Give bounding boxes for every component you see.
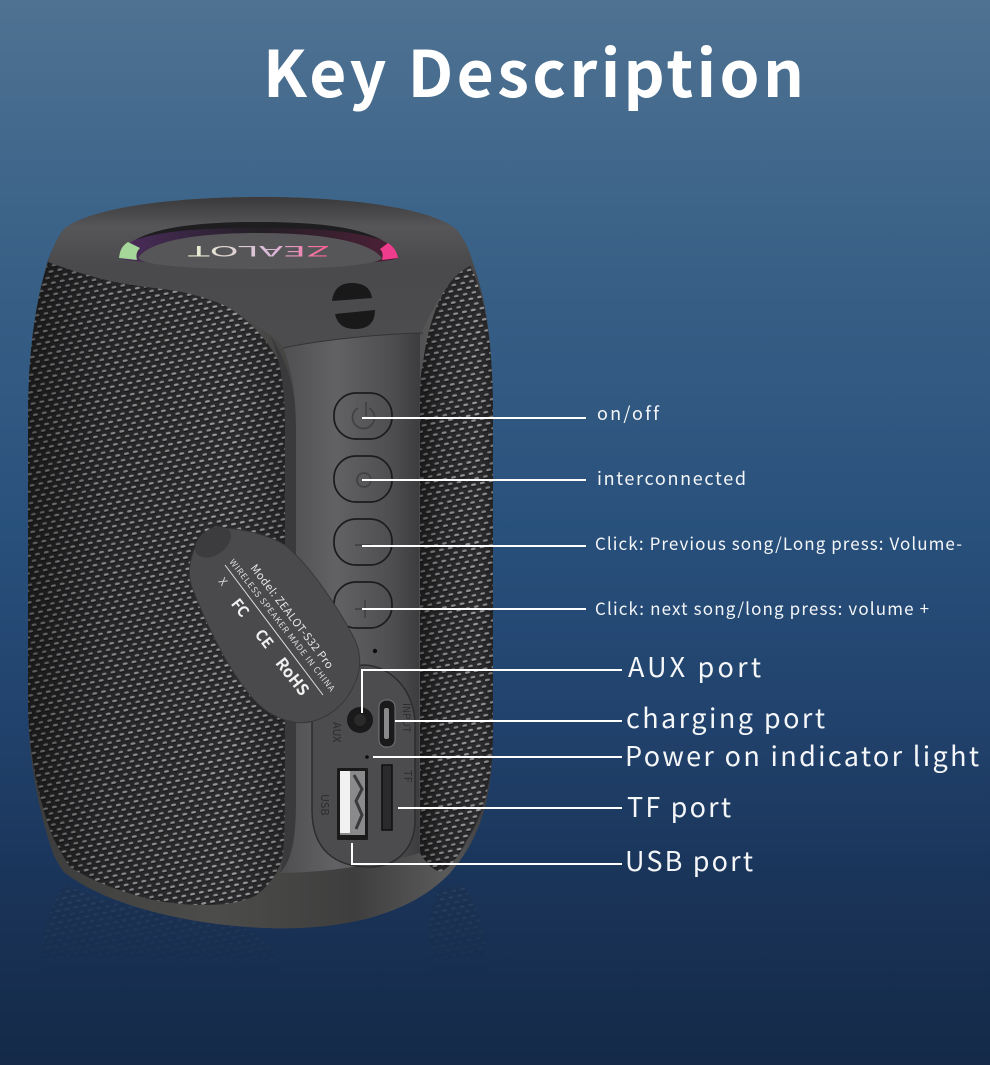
speaker: [28, 197, 493, 928]
microphone hole: [373, 649, 377, 653]
top disc: [138, 233, 382, 269]
leader line: next song: [362, 608, 586, 610]
rubber port flap: [189, 520, 360, 723]
LED glow: pink: [380, 243, 398, 260]
leader line: USB port: [352, 843, 622, 864]
USB-A port: [317, 768, 368, 840]
label: charging port: charging port: [626, 697, 825, 736]
speaker body: [28, 197, 493, 928]
label: on/off: on/off: [597, 400, 660, 426]
rubber port flap: FC: [226, 594, 254, 621]
label: power indicator: Power on indicator light: [625, 735, 979, 774]
label: TF port: TF port: [627, 786, 731, 825]
leader line: on/off: [362, 417, 586, 419]
button: power: [334, 393, 392, 439]
right fabric grille: [420, 265, 493, 872]
speaker reflection: [50, 886, 480, 927]
button: plus: [334, 582, 392, 628]
rubber port flap: X: [215, 574, 232, 589]
panel seam: [283, 333, 423, 348]
port bay: [312, 665, 415, 867]
leader line: charging port: [395, 720, 622, 722]
leader line: TF port: [398, 807, 622, 809]
USB-A port: USB: [317, 794, 333, 816]
rubber port flap: Model: ZEALOT-S32 Pro: [247, 561, 338, 672]
TF card slot: TF: [400, 770, 416, 783]
recess upper shadow: [135, 222, 382, 240]
top cap: [48, 197, 473, 348]
top ring recess: [119, 222, 398, 266]
label: interconnected: interconnected: [597, 465, 746, 491]
rubber port flap: CE: [250, 625, 278, 653]
label: next song: Click: next song/long press: volume +: [595, 595, 929, 620]
TF card slot: [382, 765, 416, 830]
USB-C charging port: INPUT: [400, 703, 415, 733]
rubber port flap: WIRELESS SPEAKER MADE IN CHINA: [227, 556, 338, 695]
speaker vents: [332, 283, 375, 329]
leader line: power indicator: [373, 756, 622, 758]
leader line: interconnected: [362, 479, 586, 481]
side shadow band: [270, 335, 296, 873]
back control panel: [280, 333, 420, 873]
left fabric grille: [28, 262, 287, 905]
AUX jack: AUX: [329, 722, 345, 743]
callouts: [352, 400, 979, 879]
AUX jack: [329, 707, 373, 743]
label: USB port: USB port: [625, 840, 753, 879]
leader line: previous song: [362, 545, 586, 547]
button: interconnect: [334, 456, 392, 502]
power indicator light: [365, 755, 369, 759]
brand mark, upside down on the disc: ZEALOT: [187, 241, 330, 261]
label: AUX port: AUX port: [628, 646, 761, 685]
LED glow: green: [119, 242, 140, 260]
button: minus: [334, 519, 392, 565]
label: previous song: Click: Previous song/Long press: Volume-: [595, 530, 962, 555]
leader line: AUX port: [362, 670, 622, 713]
rubber port flap: RoHS: [271, 651, 316, 700]
title: Key Description: [263, 24, 804, 116]
USB-C charging port: [379, 700, 415, 747]
